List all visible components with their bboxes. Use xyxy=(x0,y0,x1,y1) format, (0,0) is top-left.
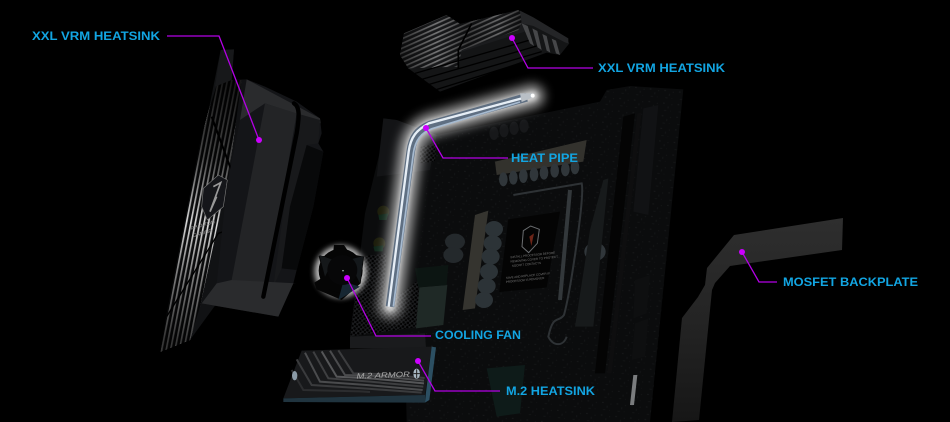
CPU socket cover xyxy=(499,212,560,292)
label: M.2 heatsink: M.2 HEATSINK xyxy=(506,386,596,398)
fins xyxy=(415,40,547,90)
CPU socket cover: REMOVING COVER TO PROTECT xyxy=(510,255,558,264)
chipset xyxy=(487,365,525,417)
CPU socket cover: SOCKET CONTACTS xyxy=(512,261,541,268)
CPU socket cover: SAVE AND REPLACE COVER IF xyxy=(506,271,550,280)
M.2 heatsink xyxy=(283,347,436,403)
top XXL VRM heatsink xyxy=(400,10,569,92)
logo: GAMING xyxy=(192,228,213,239)
main block xyxy=(202,79,323,317)
top VRM chokes xyxy=(489,119,587,186)
CPU socket cover: INSTALL PROCESSOR BEFORE xyxy=(510,251,555,259)
motherboard xyxy=(350,86,683,422)
label: XXL VRM heatsink left: XXL VRM HEATSINK xyxy=(32,31,161,43)
RAM slots xyxy=(595,112,642,373)
CPU socket cover: PROCESSOR IS REMOVED xyxy=(506,276,545,284)
label: MOSFET backplate xyxy=(739,249,918,289)
MOSFET backplate xyxy=(672,218,843,422)
socket retention lever xyxy=(513,183,582,344)
M.2 heatsink: M.2 ARMOR xyxy=(356,370,411,381)
label: M.2 heatsink xyxy=(415,358,596,398)
WiFi card xyxy=(416,285,447,328)
label: XXL VRM heatsink top: XXL VRM HEATSINK xyxy=(598,63,726,75)
label: heat pipe xyxy=(423,125,578,165)
cooling fan xyxy=(314,245,367,300)
label: MOSFET backplate: MOSFET BACKPLATE xyxy=(783,277,918,289)
logo: PHANTOM xyxy=(190,219,216,232)
label: cooling fan: COOLING FAN xyxy=(435,330,521,342)
label: XXL VRM heatsink top xyxy=(509,35,726,75)
label: heat pipe: HEAT PIPE xyxy=(511,153,578,165)
label: cooling fan xyxy=(344,275,521,342)
left VRM chokes xyxy=(463,211,503,310)
connectors xyxy=(630,375,637,405)
stripes xyxy=(161,49,242,352)
left XXL VRM heatsink xyxy=(161,49,323,352)
logo xyxy=(190,175,227,239)
label: XXL VRM heatsink left xyxy=(32,31,262,143)
ATX power connector xyxy=(633,105,658,215)
heat pipe xyxy=(389,93,535,307)
